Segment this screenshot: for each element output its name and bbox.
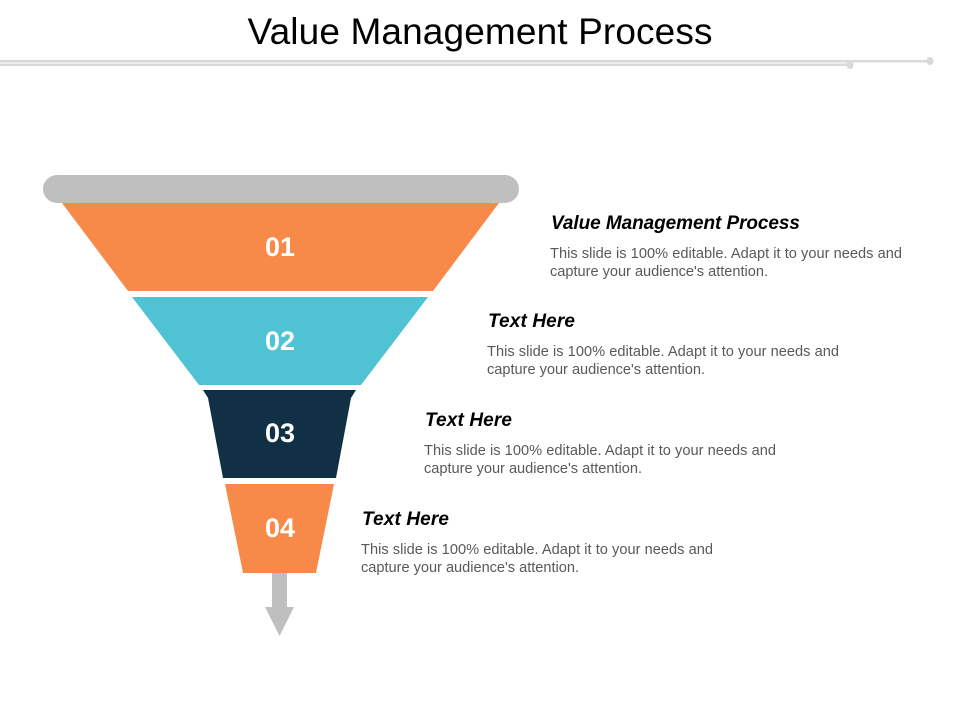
funnel segment 02: [132, 297, 428, 385]
text block 3: This slide is 100% editable. Adapt it to your needs and: [424, 443, 776, 459]
funnel segment 04: [225, 484, 334, 573]
title: Value Management Process: [248, 11, 712, 52]
funnel segment 01: 01: [265, 232, 295, 262]
funnel: [43, 175, 519, 636]
text block 4: capture your audience's attention.: [361, 560, 579, 576]
funnel segment 03: 03: [265, 418, 295, 448]
funnel segment 01: [62, 203, 499, 291]
text block 4: This slide is 100% editable. Adapt it to your needs and: [361, 542, 713, 558]
arrow: funnel output: [265, 573, 294, 636]
text block 3: capture your audience's attention.: [424, 461, 642, 477]
funnel segment 03: [203, 390, 356, 478]
funnel rim: [43, 175, 519, 203]
text block 1: This slide is 100% editable. Adapt it to your needs and: [550, 246, 902, 262]
text block 2: Text Here: [488, 311, 575, 332]
text block 1: Value Management Process: [551, 213, 800, 234]
text block 2: capture your audience's attention.: [487, 362, 705, 378]
text block 1: capture your audience's attention.: [550, 264, 768, 280]
text block 4: [361, 509, 713, 576]
text block 2: [487, 311, 839, 378]
text block 2: This slide is 100% editable. Adapt it to your needs and: [487, 344, 839, 360]
header rule with end dots: [0, 57, 934, 69]
funnel segment 02: 02: [265, 326, 295, 356]
text block 3: Text Here: [425, 410, 512, 431]
funnel segment 04: 04: [265, 513, 295, 543]
text block 4: Text Here: [362, 509, 449, 530]
text block 3: [424, 410, 776, 477]
text block 1: [550, 213, 902, 280]
